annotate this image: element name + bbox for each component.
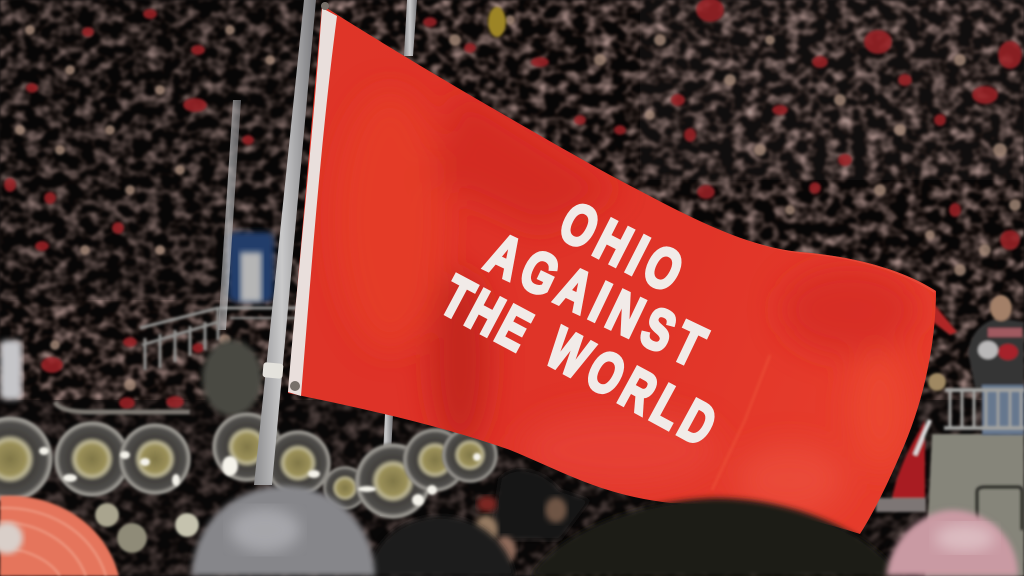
gray knit hat <box>191 486 375 576</box>
red-coated band member <box>876 305 957 512</box>
flag lettering <box>431 189 732 461</box>
concrete wall <box>925 434 1024 576</box>
line: AGAINST: AGAINST <box>477 220 721 382</box>
dark head <box>368 516 515 576</box>
line: WORLD: WORLD <box>536 315 732 461</box>
white hoist band <box>288 8 337 396</box>
metal railing <box>944 390 1024 428</box>
tuba bells <box>0 412 498 553</box>
orange striped hat <box>0 496 119 576</box>
line: OHIO: OHIO <box>550 189 698 307</box>
pink knit hat <box>886 510 1018 576</box>
large dark head <box>530 498 900 576</box>
pole: background pole <box>218 0 417 516</box>
flag cloth <box>288 5 936 534</box>
tuba section <box>0 412 590 564</box>
flag shading folds <box>335 90 920 515</box>
foreground heads <box>0 486 1018 576</box>
right side: fan, railing and wall <box>876 295 1024 576</box>
line: THE: THE <box>431 263 545 365</box>
spectator in dark hoodie <box>968 295 1024 435</box>
main flag pole <box>254 0 329 485</box>
flag <box>288 5 936 534</box>
railing: left stands <box>55 308 310 412</box>
